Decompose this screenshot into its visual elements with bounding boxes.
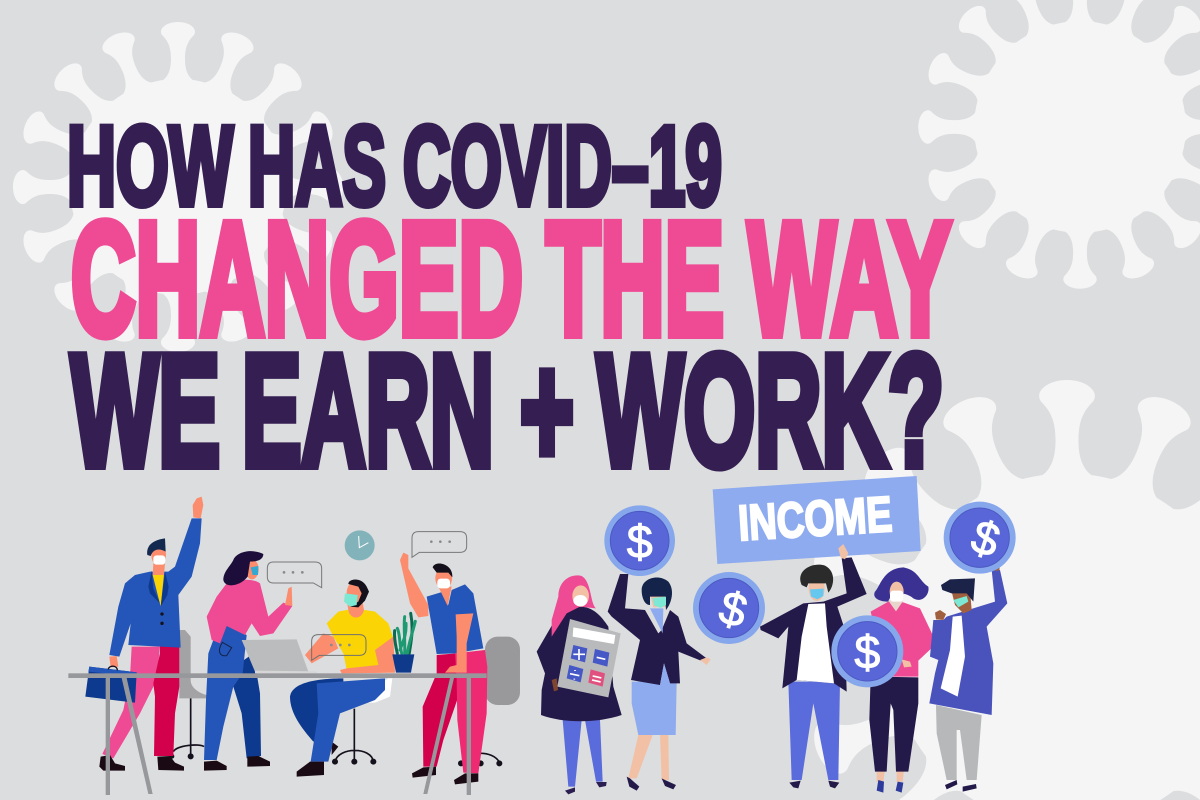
table: [68, 673, 487, 795]
icon: briefcase: [85, 666, 137, 703]
person: woman in pink sweater: [869, 567, 937, 793]
title line 2: CHANGED: [71, 189, 523, 368]
chair: left: [170, 630, 207, 759]
title line 3: WE: [71, 323, 220, 499]
icon: laptop: [242, 639, 317, 674]
speech bubble: woman: [267, 562, 322, 588]
coin: center: $: [854, 626, 880, 678]
title line 2: THE: [546, 189, 724, 368]
sign text: INCOME: [737, 486, 894, 551]
coin: top right: $: [965, 510, 1006, 567]
person: woman in pink top: [204, 551, 292, 771]
person: man in blue t-shirt: [400, 553, 487, 784]
person: woman in suit: [608, 574, 711, 791]
office scene: [68, 497, 520, 795]
coin: middle left: $: [714, 581, 752, 638]
title line 3: +: [520, 323, 574, 499]
title line 1: HOW: [67, 104, 233, 228]
person: man holding sign: [760, 544, 867, 788]
title: [67, 104, 951, 499]
icon: calculator: [557, 619, 621, 697]
title line 3: WORK?: [597, 323, 944, 499]
title line 3: [71, 323, 944, 499]
icon: potted plant: [392, 613, 415, 673]
title line 2: WAY: [748, 189, 951, 368]
virus: top right: [918, 0, 1200, 289]
person: seated man in yellow shirt: [290, 579, 395, 777]
income scene: [537, 476, 1016, 794]
chair: right: [458, 637, 520, 766]
title line 1: [67, 104, 722, 228]
person: man in blue jacket: [99, 497, 203, 771]
person: man in blue coat: [929, 559, 1007, 792]
virus: bottom right: [797, 380, 1200, 800]
speech bubble: seated man: [312, 635, 366, 660]
speech bubble: right man: [412, 532, 467, 557]
title line 1: HAS: [248, 104, 386, 228]
virus: upper left: [13, 22, 343, 352]
coin: top right: [944, 502, 1016, 574]
person: woman with calculator: [537, 575, 622, 794]
title line 3: EARN: [242, 323, 494, 499]
coin: top left: $: [627, 515, 653, 567]
chair: center: [332, 678, 392, 765]
income sign: [713, 476, 921, 564]
coin: middle left: [693, 572, 765, 644]
title line 1: COVID–19: [403, 104, 722, 228]
coin: center: [831, 615, 903, 687]
icon: clock: [345, 530, 375, 560]
coin: top left: [604, 505, 675, 576]
